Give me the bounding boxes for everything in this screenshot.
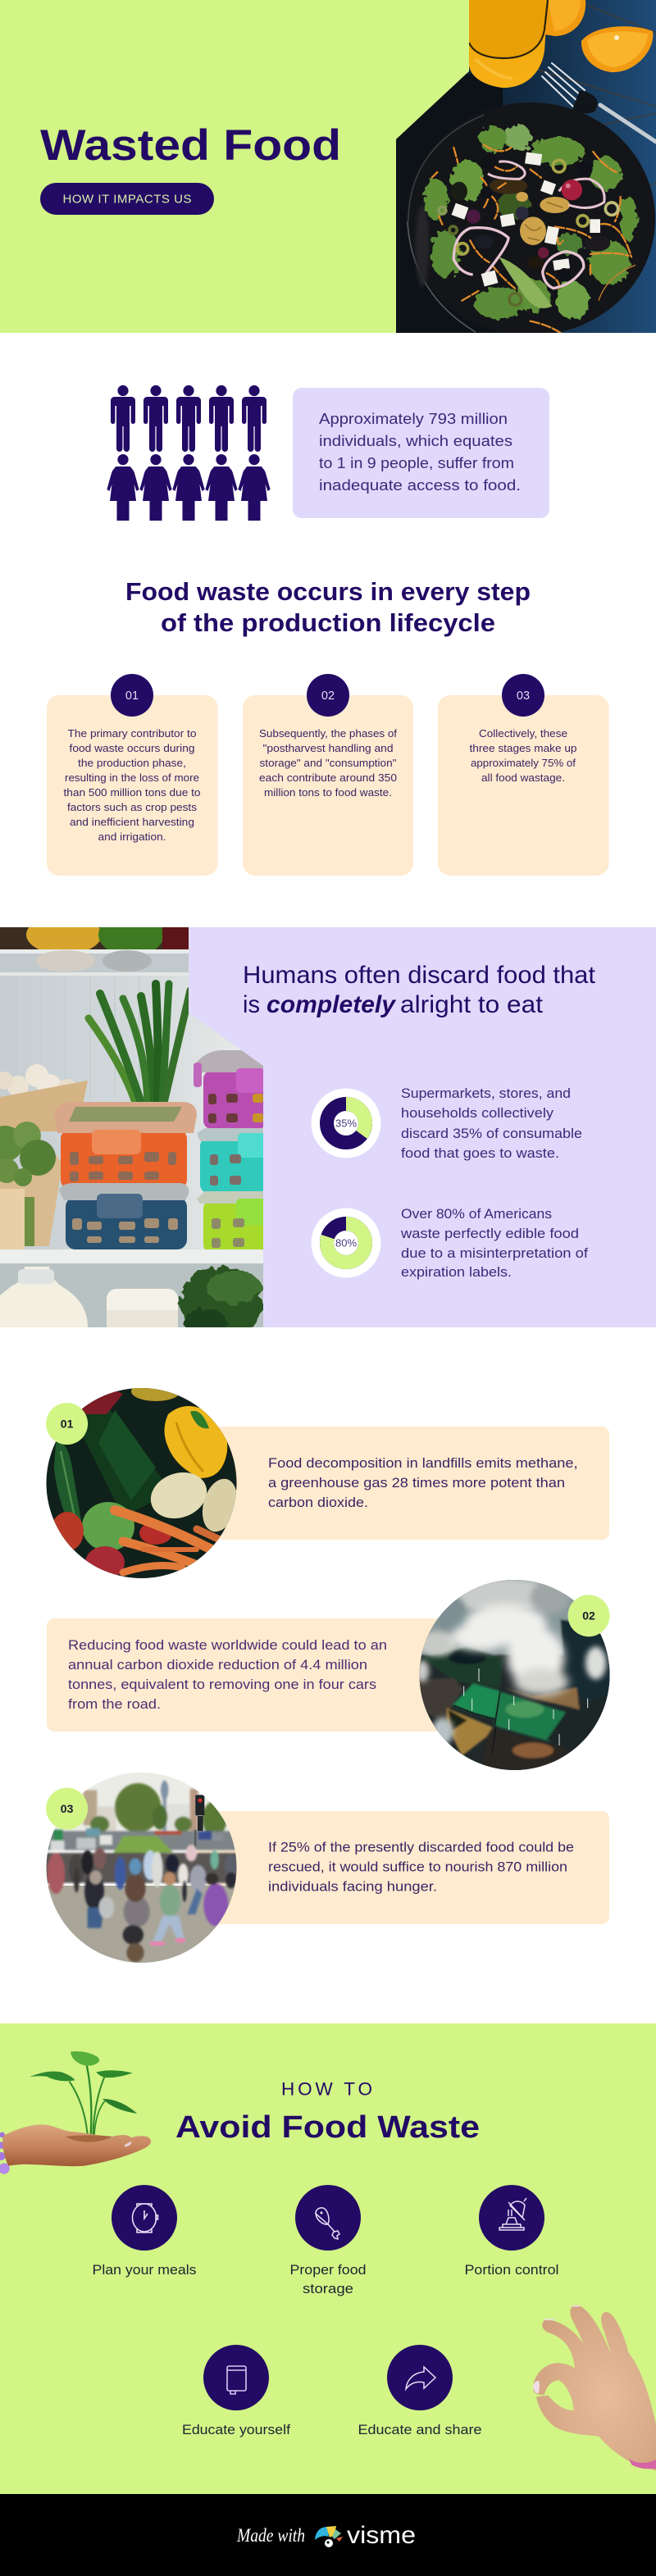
badge 03: 03 — [61, 1802, 74, 1815]
text: step 02: storage" and "consumption" — [259, 757, 397, 769]
juice glass — [469, 0, 548, 88]
green onions — [89, 984, 190, 1103]
panel: hero banner — [0, 0, 656, 335]
callout: 793 million: inadequate access to food. — [319, 476, 521, 494]
heading: production lifecycle — [125, 577, 531, 637]
orange container — [54, 1102, 197, 1189]
callout: 793 million: Approximately 793 million — [319, 410, 508, 427]
callout: 793 million: to 1 in 9 people, suffer from — [319, 454, 514, 471]
icon: device — [227, 2366, 246, 2394]
heading: production lifecycle: Food waste occurs in every step — [125, 577, 531, 606]
text: supermarkets — [401, 1086, 582, 1161]
tip: portion control — [464, 2185, 559, 2278]
black olives — [481, 161, 593, 270]
text: step 01: food waste occurs during — [69, 742, 195, 754]
chart: 35 percent donut — [312, 1089, 380, 1158]
text: step 02: "postharvest handling and — [262, 742, 394, 754]
icon: share arrow — [406, 2367, 435, 2389]
icon: chicken leg — [316, 2208, 339, 2239]
lower shelf items — [0, 1249, 263, 1327]
badge 03 — [502, 674, 544, 717]
tip: educate and share: Educate and share — [358, 2423, 482, 2437]
teal container — [197, 1128, 266, 1193]
romaine — [499, 257, 552, 308]
text: methane: a greenhouse gas 28 times more potent than — [268, 1476, 565, 1491]
text: hunger — [268, 1841, 574, 1895]
callout: 793 million — [293, 388, 549, 518]
text: methane: carbon dioxide. — [268, 1495, 368, 1510]
icon: ten people pictogram — [107, 385, 271, 521]
chart: 80 percent donut: 80% — [335, 1236, 357, 1249]
text: step 01: than 500 million tons due to — [64, 786, 200, 799]
footer — [0, 2494, 656, 2576]
cheese cubes — [452, 152, 600, 287]
tip: proper food storage: storage — [303, 2282, 353, 2296]
badge 01: 01 — [125, 690, 139, 703]
badge 02: 02 — [582, 1609, 595, 1623]
panel: discarded food — [0, 913, 656, 1340]
heading: discard food — [243, 962, 595, 1018]
heading: production lifecycle: of the production lifecycle — [161, 608, 495, 637]
text: step 01: factors such as crop pests — [67, 801, 197, 813]
text: step 03 — [469, 727, 577, 784]
text: step 01: and irrigation. — [98, 831, 166, 843]
orange slices — [543, 0, 653, 72]
row: carbon dioxide — [47, 1578, 612, 1772]
lettuce — [424, 124, 637, 320]
heading: discard food: alright to eat — [400, 991, 543, 1018]
callout: 793 million: individuals, which equates — [319, 432, 512, 449]
landscape — [418, 1578, 612, 1772]
pill: subtitle: HOW IT IMPACTS US — [62, 192, 192, 207]
wind turbines — [464, 1668, 588, 1745]
text: methane: Food decomposition in landfills emits methane, — [268, 1456, 577, 1471]
icon: watch — [133, 2204, 157, 2232]
walnuts — [516, 192, 570, 245]
text: step 01 — [64, 727, 200, 843]
text: supermarkets: food that goes to waste. — [401, 1146, 559, 1161]
badge 01: 01 — [61, 1418, 74, 1431]
photo: fridge shelves with containers — [0, 913, 266, 1340]
text: hunger: individuals facing hunger. — [268, 1880, 437, 1895]
text: supermarkets: discard 35% of consumable — [401, 1126, 582, 1141]
text: step 02: million tons to food waste. — [264, 786, 392, 799]
text: step 03: approximately 75% of — [471, 757, 576, 769]
plate — [406, 102, 655, 335]
salad — [424, 124, 637, 333]
heading: avoid food waste: Avoid Food Waste — [175, 2110, 480, 2145]
tip: educate yourself: Educate yourself — [182, 2423, 290, 2437]
carrots — [432, 145, 631, 333]
tip: portion control: Portion control — [464, 2263, 559, 2278]
title: Wasted Food — [40, 121, 341, 170]
text: step 02 — [259, 727, 397, 799]
lime container — [197, 1191, 266, 1253]
row: hunger — [45, 1771, 609, 1964]
illustration: OK hand gesture — [533, 2305, 656, 2470]
text: carbon dioxide — [68, 1638, 387, 1712]
mushrooms and crate — [0, 1064, 88, 1250]
tip: proper food storage: Proper food — [290, 2263, 366, 2278]
onion rings — [453, 162, 604, 289]
panel: how to avoid food waste — [0, 2023, 656, 2494]
dark gaps — [451, 182, 467, 201]
tip: educate yourself — [182, 2345, 290, 2437]
text: carbon dioxide: annual carbon dioxide reduction of 4.4 million — [68, 1658, 367, 1673]
photo: clouds over fields — [416, 1578, 612, 1772]
row: methane — [46, 1381, 609, 1580]
text: supermarkets: Supermarkets, stores, and — [401, 1086, 571, 1101]
badge 02: 02 — [321, 690, 335, 703]
tip: educate and share — [358, 2345, 482, 2437]
icon: cloche — [499, 2198, 526, 2230]
text: step 03: Collectively, these — [479, 727, 567, 740]
text: hunger: If 25% of the presently discarded food could be — [268, 1841, 574, 1855]
text: methane — [268, 1456, 577, 1510]
tip: plan your meals: Plan your meals — [92, 2263, 197, 2278]
text: step 02: each contribute around 350 — [259, 771, 397, 784]
blue container — [59, 1183, 189, 1249]
clouds — [416, 1578, 606, 1745]
text: americans — [400, 1207, 588, 1280]
photo: vegetables — [46, 1381, 243, 1580]
card: step 03 — [438, 674, 608, 876]
crowd — [45, 1845, 239, 1962]
text: step 01: The primary contributor to — [67, 727, 197, 740]
badge 02 — [567, 1595, 610, 1636]
badge 03 — [46, 1787, 88, 1830]
text: carbon dioxide: from the road. — [68, 1697, 161, 1712]
photo: crowd crossing street — [45, 1771, 239, 1964]
logo: visme mark — [315, 2526, 343, 2547]
text: step 01: resulting in the loss of more — [65, 771, 199, 784]
fork — [542, 63, 656, 142]
text: americans: waste perfectly edible food — [400, 1227, 579, 1241]
pill: subtitle — [40, 183, 214, 215]
text: hunger: rescued, it would suffice to nourish 870 million — [268, 1860, 567, 1875]
card: step 01 — [47, 674, 218, 876]
top shelf produce — [0, 913, 189, 1099]
badge 01 — [46, 1403, 88, 1445]
purple container — [194, 1050, 266, 1129]
text: step 03: all food wastage. — [481, 771, 565, 784]
red radish — [562, 180, 582, 200]
skyline — [45, 1781, 239, 1859]
text: supermarkets: households collectively — [401, 1106, 554, 1121]
tip: proper food storage — [290, 2185, 366, 2296]
tip: plan your meals — [92, 2185, 197, 2278]
chart: 35 percent donut: 35% — [335, 1117, 357, 1130]
heading: discard food: is — [243, 991, 260, 1018]
heading: discard food: completely — [266, 991, 397, 1018]
card: step 02 — [243, 674, 413, 876]
text: step 02: Subsequently, the phases of — [259, 727, 397, 740]
text: carbon dioxide: Reducing food waste worldwide could lead to an — [68, 1638, 387, 1653]
text: carbon dioxide: tonnes, equivalent to removing one in four cars — [68, 1677, 376, 1692]
chart: 80 percent donut — [312, 1208, 380, 1277]
text: americans: Over 80% of Americans — [401, 1207, 552, 1222]
heading: discard food: Humans often discard food that — [243, 962, 595, 989]
photo: salad plate and orange juice — [396, 0, 656, 335]
green olives — [439, 160, 618, 305]
text: step 01: the production phase, — [78, 757, 186, 769]
heading: how to: HOW TO — [281, 2079, 372, 2100]
text: step 03: three stages make up — [469, 742, 577, 754]
text: americans: due to a misinterpretation of — [401, 1246, 588, 1261]
logo: visme wordmark: visme — [347, 2522, 416, 2549]
text: step 01: and inefficient harvesting — [70, 816, 194, 828]
text: americans: expiration labels. — [401, 1265, 512, 1280]
badge 03: 03 — [517, 690, 530, 703]
badge 02 — [307, 674, 349, 717]
illustration: hand holding plant — [0, 2051, 151, 2174]
badge 01 — [111, 674, 153, 717]
text: made with: Made with — [236, 2525, 305, 2546]
